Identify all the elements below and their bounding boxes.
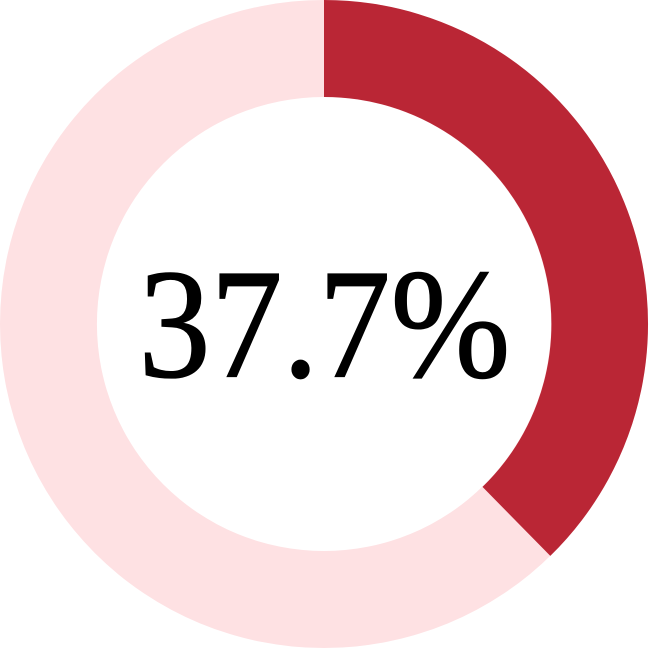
donut segment: 37.7% [324,0,648,556]
center value: 37.7% [139,237,510,411]
